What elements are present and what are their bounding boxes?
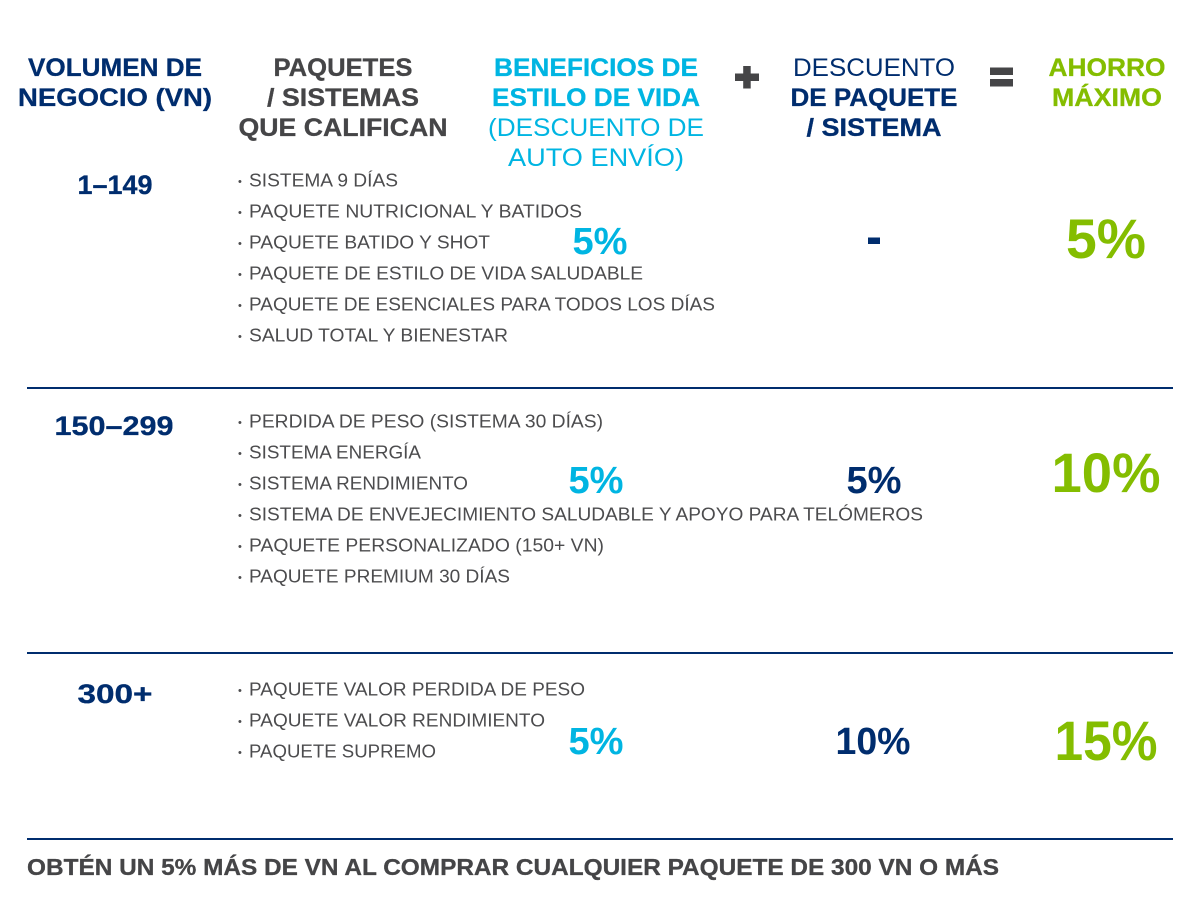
- row 1: 1–149 VN: [78, 170, 1146, 346]
- package list 2: •: [238, 479, 242, 491]
- heading: paquetes / sistemas que califican: [238, 54, 448, 142]
- package list 1: •: [238, 207, 242, 219]
- package list 1: •: [238, 331, 242, 343]
- package list 2: •: [238, 448, 242, 460]
- package list 3: •: [238, 716, 242, 728]
- row 3: 300+ VN: [78, 679, 1158, 772]
- maximum saving 10%: 10%: [1052, 441, 1160, 504]
- package discount 10%: 10%: [836, 721, 910, 763]
- package list 2: PERDIDA DE PESO (SISTEMA 30 DÍAS): [249, 412, 603, 432]
- divider: [27, 838, 1173, 840]
- package discount none: [868, 238, 880, 244]
- heading: volumen de negocio: [18, 54, 212, 112]
- heading: beneficios de estilo de vida: (DESCUENTO DE: [488, 114, 704, 142]
- heading: beneficios de estilo de vida: ESTILO DE VIDA: [492, 84, 700, 112]
- heading: volumen de negocio: VOLUMEN DE: [28, 54, 202, 82]
- package list 2: SISTEMA ENERGÍA: [249, 442, 421, 462]
- package list 2: •: [238, 572, 242, 584]
- volume label 1–149: 1–149: [78, 170, 152, 200]
- package list 1: •: [238, 269, 242, 281]
- lifestyle discount 5%: 5%: [572, 221, 628, 263]
- heading: descuento de paquete / sistema: DESCUENTO: [793, 54, 955, 82]
- package list 2: [238, 412, 923, 586]
- package list 1: SISTEMA 9 DÍAS: [249, 170, 398, 190]
- package list 1: PAQUETE DE ESENCIALES PARA TODOS LOS DÍAS: [249, 294, 715, 314]
- heading: paquetes / sistemas que califican: PAQUETES: [274, 54, 412, 82]
- divider: [27, 387, 1173, 389]
- heading: ahorro máximo: AHORRO: [1048, 54, 1166, 82]
- icon: equals sign: [990, 68, 1013, 86]
- heading: ahorro máximo: MÁXIMO: [1052, 83, 1162, 112]
- package list 3: PAQUETE SUPREMO: [249, 742, 436, 762]
- package list 1: [238, 170, 715, 346]
- package list 1: •: [238, 238, 242, 250]
- volume label 150–299: 150–299: [54, 411, 174, 441]
- heading: beneficios de estilo de vida: [488, 54, 704, 172]
- package list 2: PAQUETE PREMIUM 30 DÍAS: [249, 566, 510, 586]
- package list 3: •: [238, 685, 242, 697]
- divider: [27, 652, 1173, 654]
- package list 1: PAQUETE DE ESTILO DE VIDA SALUDABLE: [249, 264, 643, 284]
- package list 3: [238, 680, 585, 762]
- package list 2: •: [238, 417, 242, 429]
- maximum saving 5%: 5%: [1066, 207, 1146, 270]
- package list 1: PAQUETE NUTRICIONAL Y BATIDOS: [249, 202, 582, 222]
- heading: descuento de paquete / sistema: / SISTEMA: [806, 114, 942, 142]
- lifestyle discount 5%: 5%: [568, 721, 624, 763]
- maximum saving 15%: 15%: [1054, 709, 1158, 772]
- package list 2: PAQUETE PERSONALIZADO (150+ VN): [249, 536, 604, 556]
- heading: paquetes / sistemas que califican: / SISTEMAS: [267, 84, 419, 112]
- package list 1: •: [238, 300, 242, 312]
- heading: descuento de paquete / sistema: [790, 54, 958, 142]
- heading: beneficios de estilo de vida: BENEFICIOS DE: [494, 54, 698, 82]
- package discount 5%: 5%: [846, 460, 902, 502]
- package list 3: •: [238, 747, 242, 759]
- lifestyle discount 5%: 5%: [568, 460, 624, 502]
- footer note: OBTÉN UN 5% MÁS DE VN AL COMPRAR CUALQUIER PAQUETE DE 300 VN O MÁS: [27, 853, 999, 880]
- row 2: 150–299 VN: [54, 411, 1160, 586]
- heading: beneficios de estilo de vida: AUTO ENVÍO): [508, 143, 684, 172]
- package list 1: SALUD TOTAL Y BIENESTAR: [249, 326, 508, 346]
- heading: paquetes / sistemas que califican: QUE CALIFICAN: [238, 114, 448, 142]
- heading: ahorro máximo: [1048, 54, 1166, 112]
- package list 3: PAQUETE VALOR RENDIMIENTO: [249, 710, 545, 730]
- package list 2: SISTEMA RENDIMIENTO: [249, 474, 468, 494]
- package list 2: •: [238, 541, 242, 553]
- package list 2: SISTEMA DE ENVEJECIMIENTO SALUDABLE Y APOYO PARA TELÓMEROS: [249, 504, 923, 524]
- volume label 300+: 300+: [78, 679, 152, 709]
- package list 1: PAQUETE BATIDO Y SHOT: [249, 232, 490, 252]
- package list 2: •: [238, 510, 242, 522]
- heading: descuento de paquete / sistema: DE PAQUETE: [790, 84, 958, 112]
- icon: plus sign: [735, 66, 759, 88]
- package list 3: PAQUETE VALOR PERDIDA DE PESO: [249, 680, 585, 700]
- heading: volumen de negocio: NEGOCIO (VN): [18, 84, 212, 112]
- package list 1: •: [238, 176, 242, 188]
